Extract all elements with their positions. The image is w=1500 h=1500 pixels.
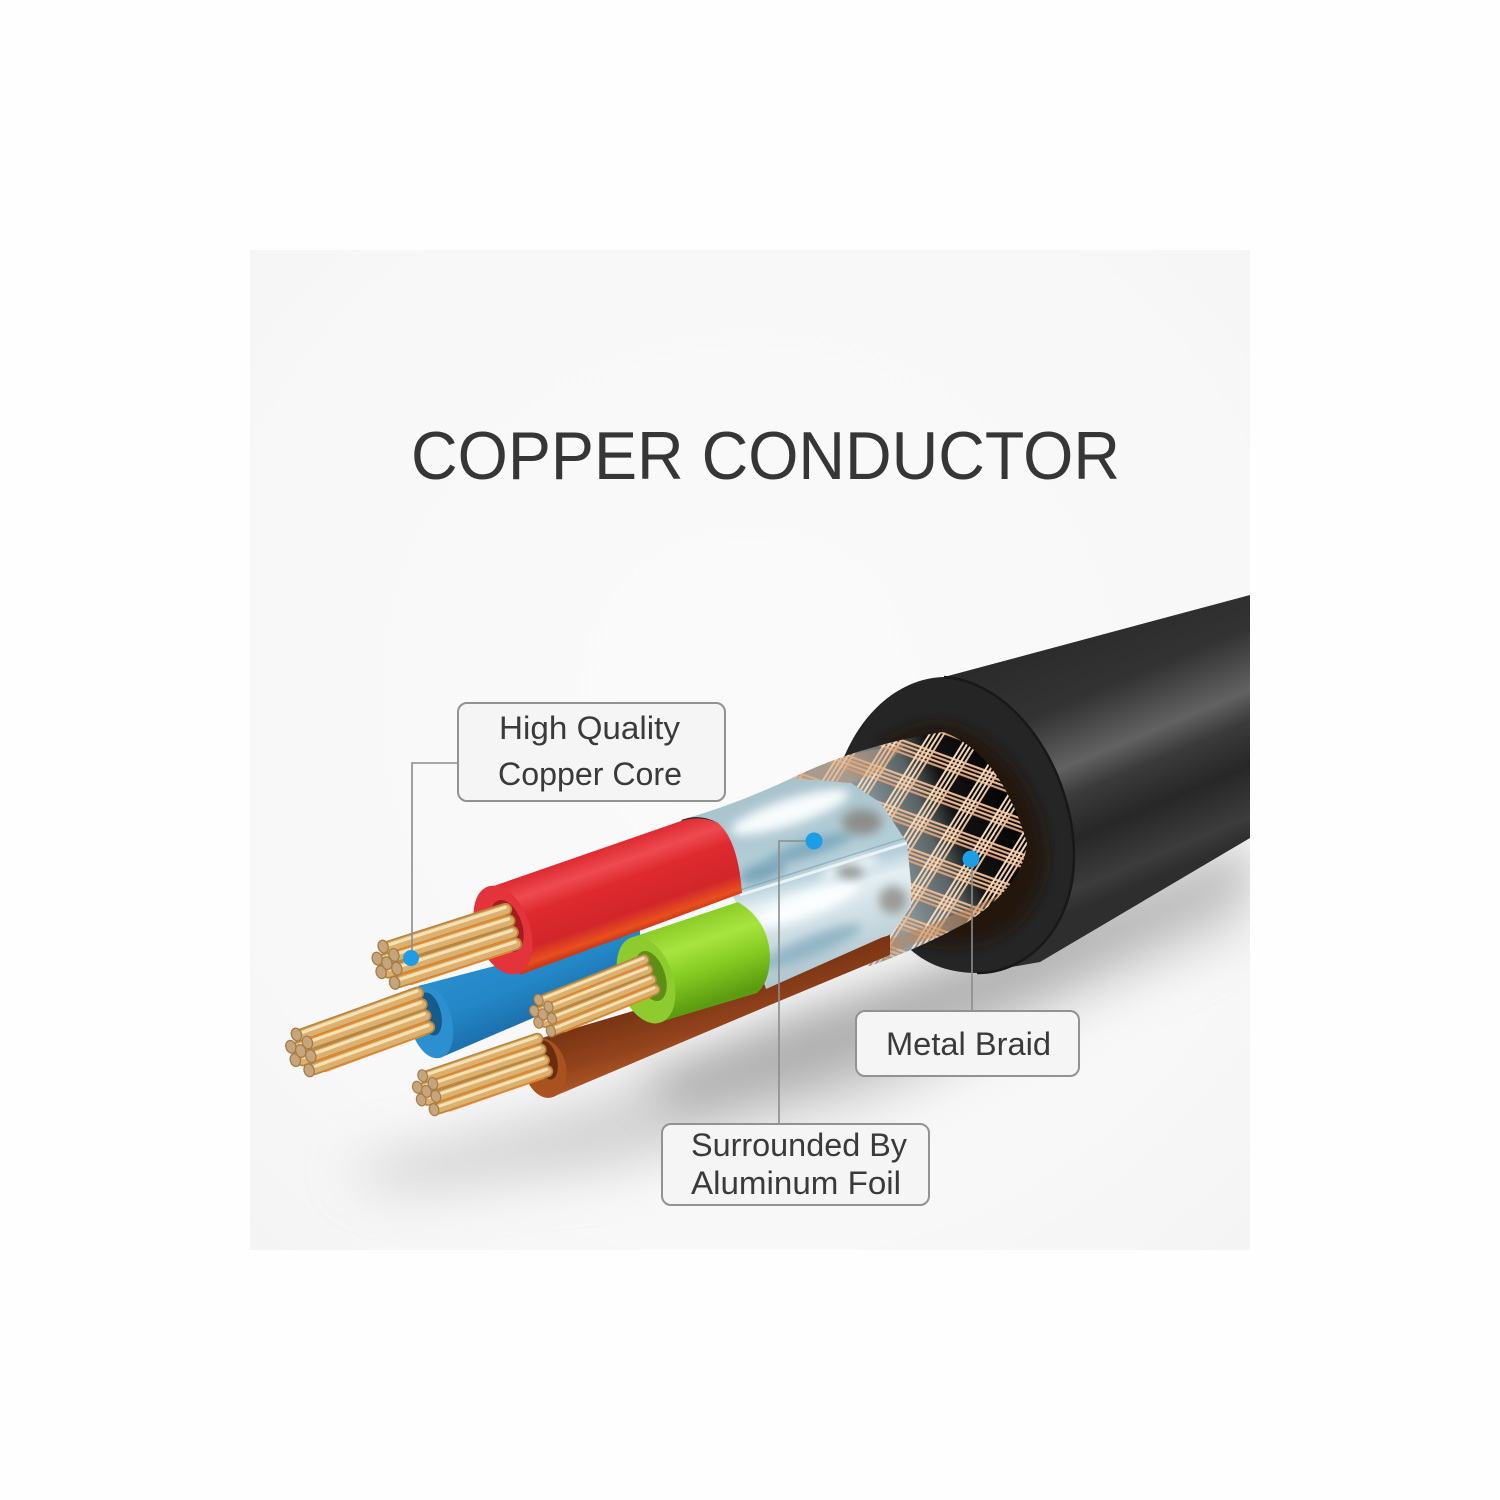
metal braid <box>792 732 1027 966</box>
cable shadow <box>340 850 1250 1190</box>
background panel <box>250 250 1250 1250</box>
callout: surrounded by aluminum foil <box>662 832 929 1205</box>
callout: metal braid <box>856 850 1079 1076</box>
blue wire <box>402 928 640 1063</box>
callout: high quality copper core: High Quality <box>499 710 680 746</box>
cable illustration <box>281 595 1250 1120</box>
green wire copper strands <box>525 956 658 1041</box>
callout: metal braid: Metal Braid <box>886 1026 1051 1062</box>
callout: surrounded by aluminum foil: Surrounded By <box>691 1127 907 1163</box>
title: COPPER CONDUCTOR <box>411 418 1120 494</box>
callout: high quality copper core: Copper Core <box>498 756 682 792</box>
brown wire sheath <box>528 935 890 1098</box>
brown wire copper strands <box>408 1035 550 1120</box>
black outer jacket <box>844 595 1250 973</box>
red wire <box>462 818 742 982</box>
aluminum foil <box>681 778 911 989</box>
green wire <box>606 902 770 1031</box>
red wire copper strands <box>368 905 518 993</box>
brown wire cap <box>517 1034 573 1102</box>
callout: surrounded by aluminum foil: Aluminum Foil <box>691 1165 901 1201</box>
blue wire copper strands <box>281 989 432 1081</box>
callout: high quality copper core <box>403 703 725 966</box>
